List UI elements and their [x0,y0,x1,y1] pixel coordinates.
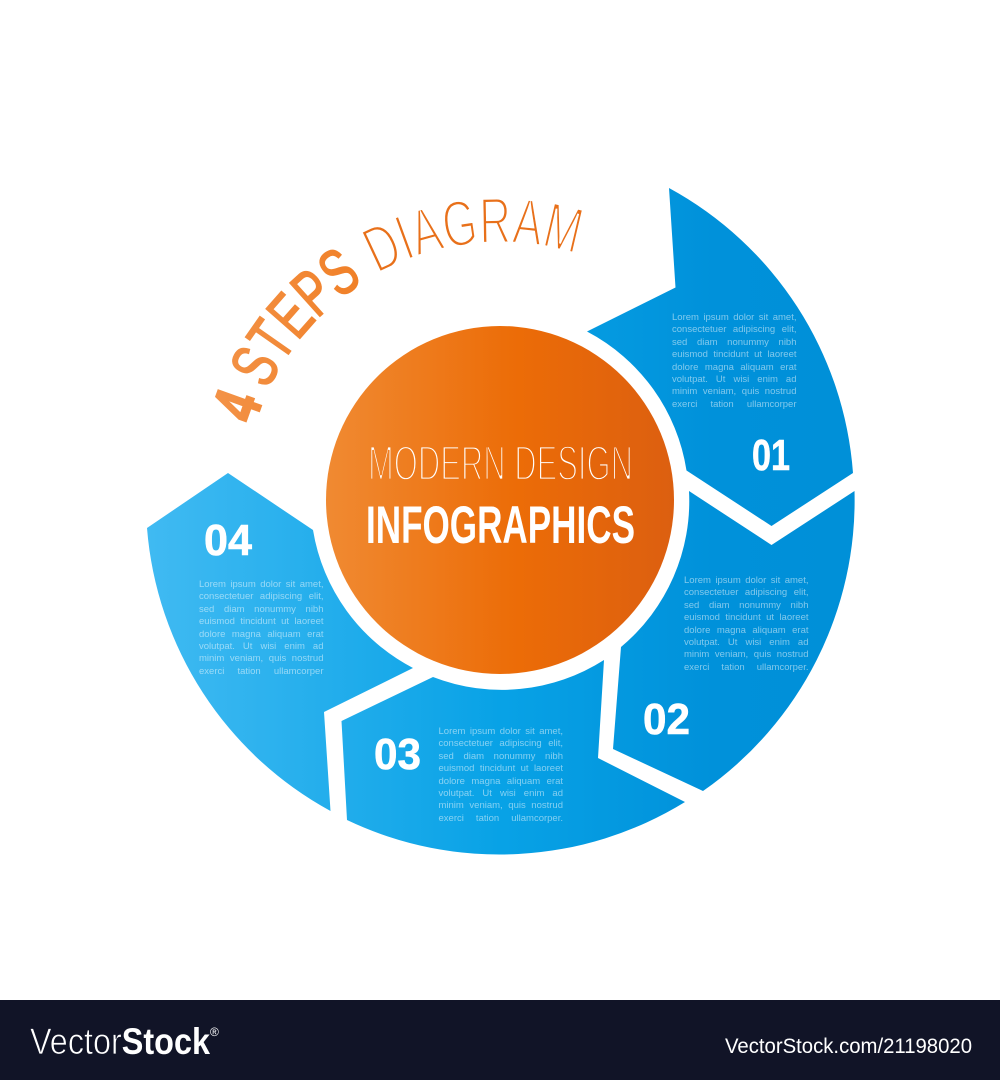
segment 1 arrow [587,188,853,526]
step number 04: 04 [204,516,253,565]
step 3 text: exerci tation ullamcorper. [438,813,563,824]
step 2 text: Lorem ipsum dolor sit amet, [684,575,808,586]
step 3 text: minim veniam, quis nostrud [438,800,563,811]
step 2 text [684,575,808,673]
step 4 text: Lorem ipsum dolor sit amet, [199,579,324,590]
step 3 text: sed diam nonummy nibh [438,751,563,762]
step 3 text: euismod tincidunt ut laoreet [438,763,563,774]
step 4 text: consectetuer adipiscing elit, [199,591,324,602]
step number 02: 02 [643,695,690,744]
step 4 text: sed diam nonummy nibh [199,604,324,615]
curved title: diagram: DIAGRAM [362,200,582,271]
step 4 text: volutpat. Ut wisi enim ad [199,641,324,652]
step number 01: 01 [752,431,790,480]
step 3 text: volutpat. Ut wisi enim ad [438,788,563,799]
step 2 text: consectetuer adipiscing elit, [684,587,808,598]
step 3 text: dolore magna aliquam erat [438,776,563,787]
step 4 text: minim veniam, quis nostrud [199,653,324,664]
step 2 text: minim veniam, quis nostrud [684,649,808,660]
segment 4 arrow [147,473,413,811]
step 4 text [199,579,324,677]
footer bar [0,1000,1000,1080]
step 2 text: volutpat. Ut wisi enim ad [684,637,808,648]
step 4 text: exerci tation ullamcorper [199,666,324,677]
step 1 text: sed diam nonummy nibh [672,337,796,348]
step number 03: 03 [374,730,421,779]
footer logo: VectorStock [30,1021,210,1062]
step 2 text: exerci tation ullamcorper. [684,662,808,673]
step 1 text: euismod tincidunt ut laoreet [672,349,796,360]
step 1 text: volutpat. Ut wisi enim ad [672,374,796,385]
step 2 text: dolore magna aliquam erat [684,625,808,636]
step 3 text [438,726,563,824]
footer logo registered mark: ® [210,1025,219,1039]
step 3 text: Lorem ipsum dolor sit amet, [438,726,563,737]
segment 2 arrow [613,491,855,791]
step 4 text: dolore magna aliquam erat [199,629,324,640]
step 1 text [672,312,796,410]
step 1 text: consectetuer adipiscing elit, [672,324,796,335]
center heading: infographics: INFOGRAPHICS [366,496,635,555]
footer image id: VectorStock.com/21198020 [725,1035,972,1058]
step 3 text: consectetuer adipiscing elit, [438,738,563,749]
center heading: modern design: MODERN DESIGN [368,437,633,491]
step 2 text: sed diam nonummy nibh [684,600,808,611]
segment 3 arrow [342,660,685,855]
center orange circle [326,326,674,674]
step 2 text: euismod tincidunt ut laoreet [684,612,808,623]
step 1 text: dolore magna aliquam erat [672,362,796,373]
step 1 text: minim veniam, quis nostrud [672,386,796,397]
step 1 text: Lorem ipsum dolor sit amet, [672,312,796,323]
step 1 text: exerci tation ullamcorper [672,399,796,410]
curved title: 4 steps: 4 STEPS [215,250,358,422]
step 4 text: euismod tincidunt ut laoreet [199,616,324,627]
